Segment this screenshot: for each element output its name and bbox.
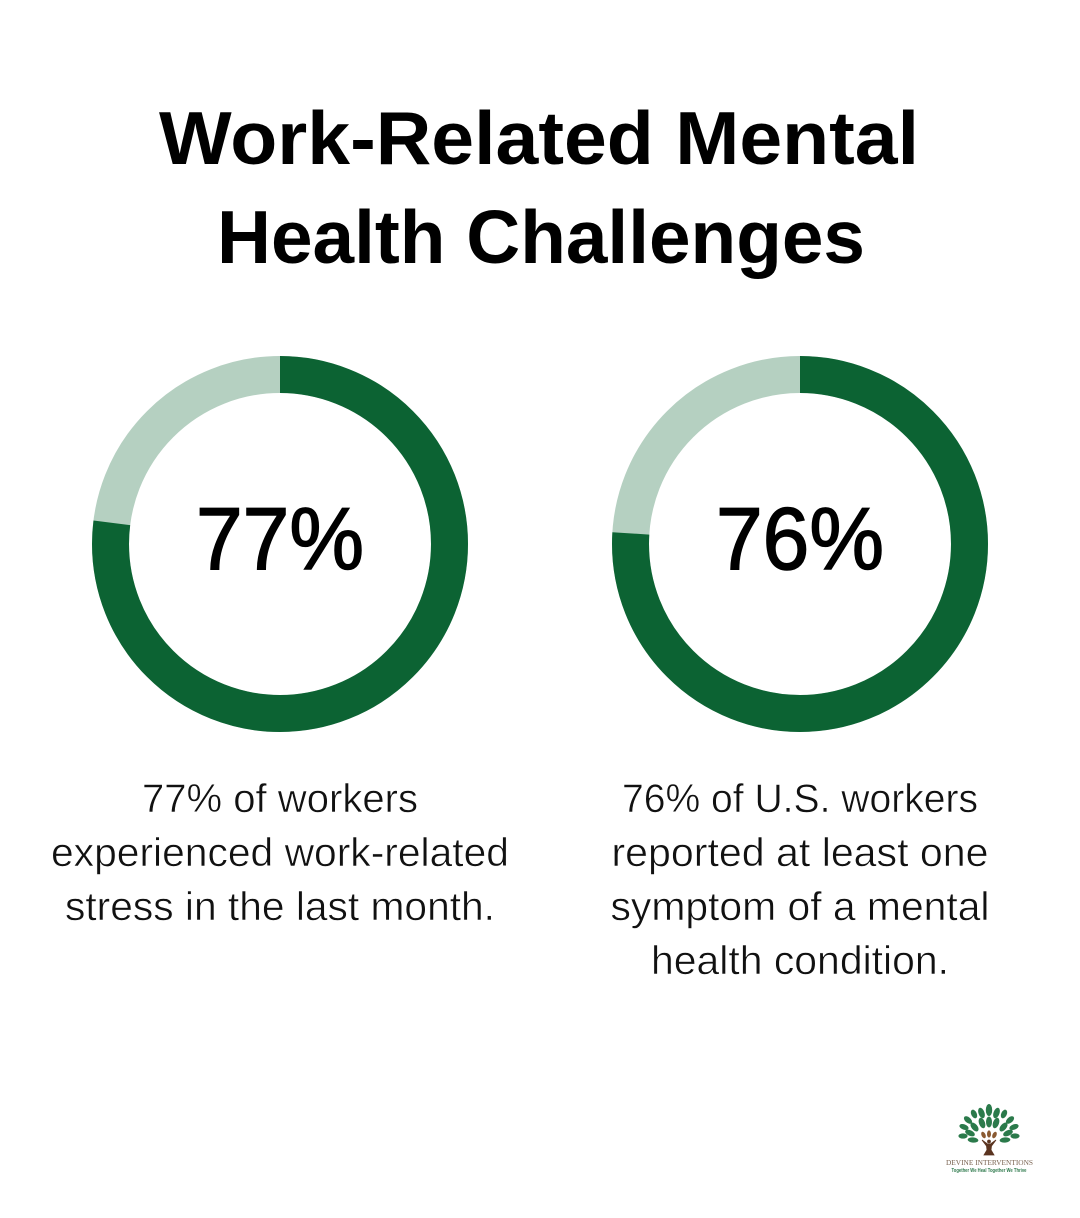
description: 76%: reported at least one (612, 831, 988, 875)
description: 77%: stress in the last month. (65, 885, 495, 929)
donut chart: 77% (110, 374, 450, 714)
panel: 77% stat (51, 374, 509, 929)
description: 76% (610, 777, 990, 983)
description: 76%: health condition. (651, 939, 949, 983)
title: Health Challenges (217, 195, 865, 279)
title: Work-Related Mental (159, 96, 919, 180)
description: 76%: 76% of U.S. workers (622, 777, 978, 821)
description: 77%: 77% of workers (142, 777, 418, 821)
panel: 76% stat (610, 374, 990, 983)
value: 76%: 76% (716, 489, 884, 588)
donut chart: 76% (630, 374, 970, 714)
icon: tree (958, 1104, 1020, 1155)
logo tagline: Together We Heal Together We Thrive (952, 1168, 1027, 1174)
value: 77%: 77% (196, 489, 364, 588)
logo name: DEVINE INTERVENTIONS (946, 1158, 1033, 1167)
title (159, 96, 919, 279)
description: 77%: experienced work-related (51, 831, 509, 875)
logo: Devine Interventions (946, 1104, 1033, 1174)
description: 76%: symptom of a mental (610, 885, 990, 929)
description: 77% (51, 777, 509, 929)
